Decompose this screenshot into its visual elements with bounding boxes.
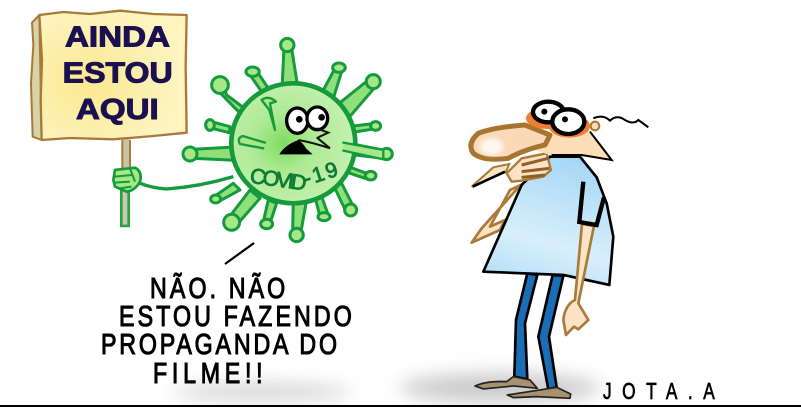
man ear: [591, 122, 599, 130]
speech text: NÃO. NÃO: [150, 271, 285, 305]
sign text: ESTOU: [63, 58, 173, 90]
man left arm: [472, 185, 521, 243]
arm and hand holding pole: [113, 168, 233, 192]
man legs: [514, 273, 563, 389]
man nose: [471, 125, 550, 159]
man face: [530, 130, 612, 160]
virus spikes: [192, 48, 383, 233]
man right arm: [563, 224, 594, 335]
man hand on chin: [507, 153, 551, 182]
man shirt: [483, 157, 613, 285]
sign text: AQUI: [76, 94, 159, 126]
man hair squiggle: [593, 117, 648, 127]
man glasses: [526, 102, 590, 138]
man shoes: [475, 377, 571, 398]
speech text: PROPAGANDA DO: [101, 327, 337, 361]
virus eyes: [287, 107, 328, 133]
man chin: [472, 164, 509, 187]
sign with pole: [31, 11, 187, 226]
virus nose and mouth: [298, 128, 330, 148]
man character: [471, 102, 648, 398]
virus label: [249, 157, 341, 195]
speech text: FILME!!: [153, 356, 263, 390]
sign text: [63, 22, 173, 126]
virus spike tips: [183, 38, 392, 242]
speech text: ESTOU FAZENDO: [119, 299, 352, 333]
ground shadow: right: [400, 373, 600, 403]
sleeve: [579, 182, 604, 225]
ground shadow: left: [172, 383, 352, 401]
speech tail: [225, 243, 254, 264]
signature: JOTA.A: [603, 380, 715, 405]
virus character: [113, 38, 392, 242]
bottom border: [0, 405, 801, 407]
virus label: -19: [300, 157, 341, 191]
sign pole: [121, 139, 130, 226]
sign board side: [31, 15, 42, 140]
sign text: AINDA: [65, 22, 170, 54]
speech text: [101, 271, 352, 390]
inner spikes: [239, 98, 383, 161]
virus body: [231, 83, 355, 203]
virus label: COVID: [249, 164, 308, 195]
sign board front: [39, 11, 187, 140]
